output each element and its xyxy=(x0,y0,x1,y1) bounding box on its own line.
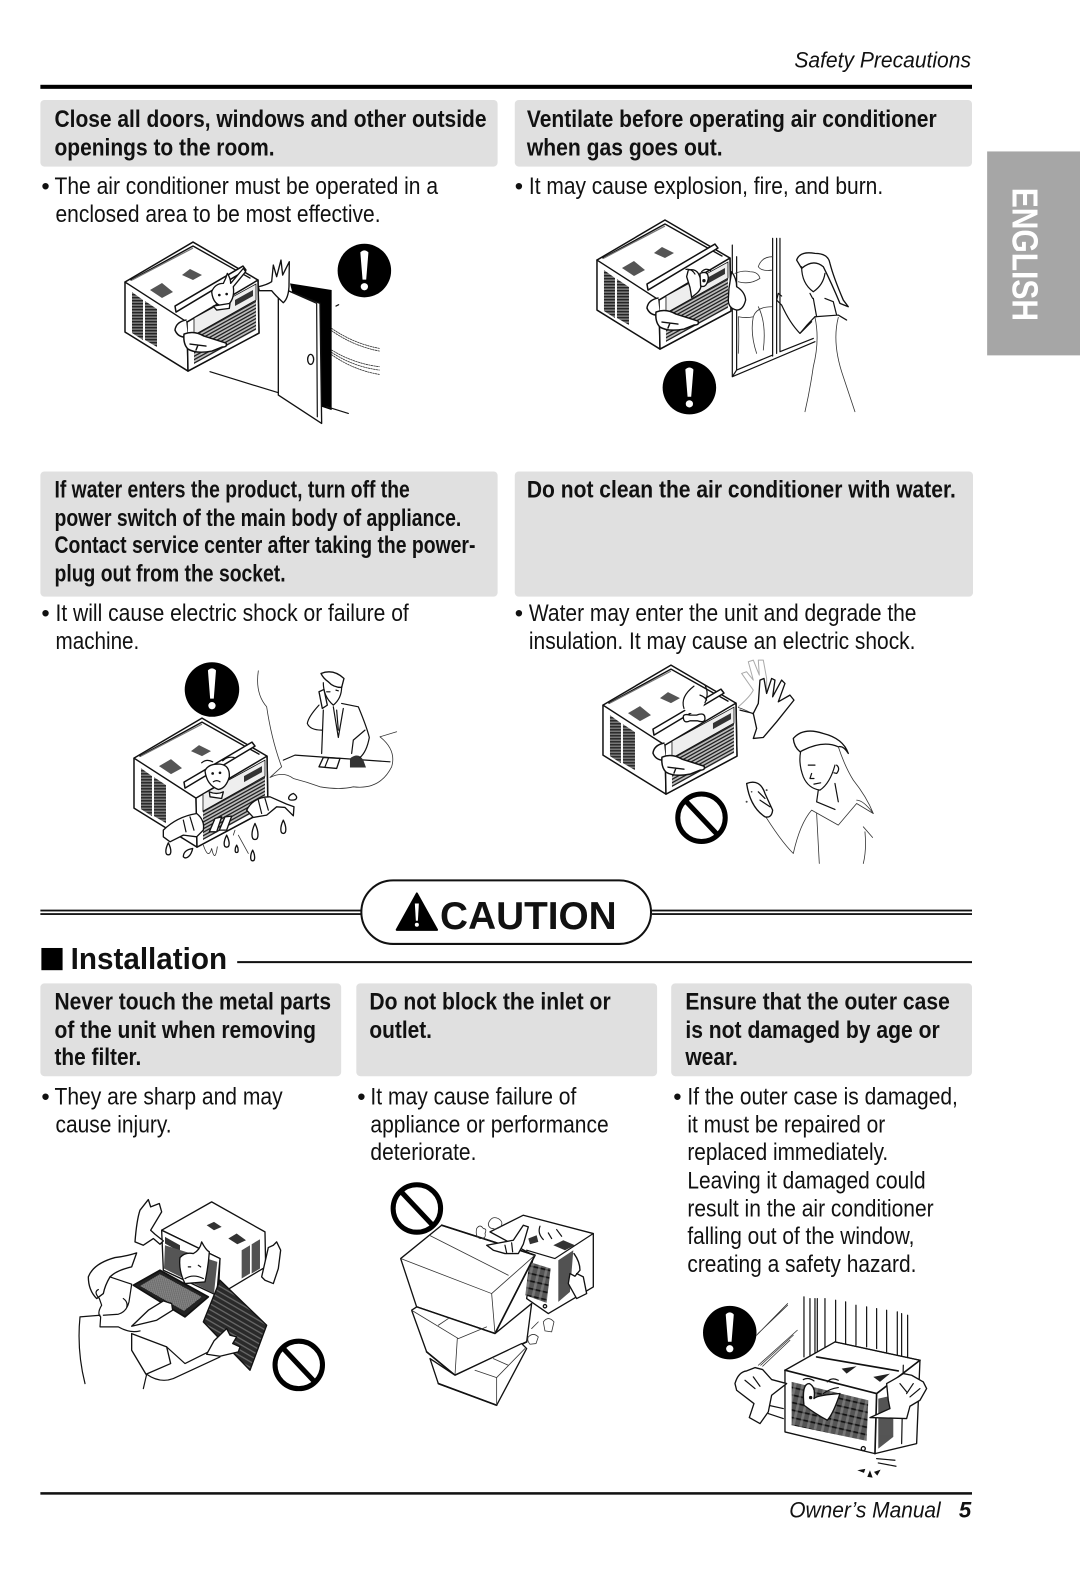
heading: ventilate: when gas goes out. xyxy=(526,135,723,161)
section heading: Installation: Installation xyxy=(71,943,227,976)
icon: prohibition sign xyxy=(393,1185,441,1232)
heading: do not clean: Do not clean the air conditioner with water. xyxy=(527,478,956,504)
text: inlet explanation: • xyxy=(357,1084,366,1110)
illustration: damaged unit falling from window xyxy=(735,1297,927,1478)
text: ventilate explanation: • xyxy=(515,174,523,200)
text: outer case explanation: falling out of the window, xyxy=(687,1224,914,1250)
illustration: air conditioner and woman with wet remote xyxy=(603,660,873,863)
header: Safety Precautions: Safety Precautions xyxy=(794,48,971,73)
panel: water enters the product xyxy=(40,471,498,861)
text: do not clean explanation: insulation. It may cause an electric shock. xyxy=(529,629,915,655)
heading: metal parts: the filter. xyxy=(55,1045,141,1071)
text: outer case explanation: replaced immediately. xyxy=(687,1140,888,1166)
heading: water enters xyxy=(40,471,498,597)
text: inlet explanation: deteriorate. xyxy=(370,1140,476,1166)
illustration: air conditioner by open door xyxy=(125,242,379,423)
panel: close doors and windows xyxy=(40,100,498,423)
text: water enters explanation xyxy=(41,601,409,655)
text: do not clean explanation: • xyxy=(515,601,523,627)
text: outer case explanation: creating a safety hazard. xyxy=(687,1252,916,1278)
text: inlet explanation: It may cause failure of xyxy=(370,1084,577,1110)
text: water enters explanation: It will cause electric shock or failure of xyxy=(56,601,409,627)
heading: outer case xyxy=(671,983,972,1076)
text: outer case explanation: it must be repaired or xyxy=(687,1113,885,1139)
illustration: air conditioner and woman at window xyxy=(597,220,855,412)
text: water enters explanation: machine. xyxy=(56,629,139,655)
illustration: boxes blocking the unit xyxy=(401,1215,593,1405)
heading: outer case: is not damaged by age or xyxy=(685,1018,940,1044)
text: metal parts explanation xyxy=(41,1084,283,1139)
heading: ventilate xyxy=(515,100,972,167)
heading: ventilate: Ventilate before operating air conditioner xyxy=(527,107,937,133)
section heading: Installation xyxy=(41,943,972,976)
text: inlet explanation xyxy=(357,1084,609,1166)
heading: outer case: wear. xyxy=(684,1045,738,1071)
text: close doors explanation: enclosed area to be most effective. xyxy=(56,202,381,228)
caution banner: CAUTION xyxy=(440,894,617,938)
icon: prohibition sign xyxy=(678,794,725,841)
icon: mandatory exclamation xyxy=(185,662,239,717)
heading: water enters: Contact service center after taking the power- xyxy=(55,533,475,559)
heading: inlet: Do not block the inlet or xyxy=(369,990,611,1016)
side tab: English: ENGLISH xyxy=(1004,188,1045,321)
text: outer case explanation: • xyxy=(673,1084,682,1110)
icon: mandatory exclamation xyxy=(663,361,716,414)
text: do not clean explanation: Water may enter the unit and degrade the xyxy=(529,601,916,627)
heading: metal parts: of the unit when removing xyxy=(55,1018,316,1044)
footer: Owner's Manual page 5: Owner’s Manual xyxy=(789,1497,942,1522)
side tab: English xyxy=(987,151,1080,355)
heading: metal parts xyxy=(40,983,341,1076)
heading: close doors xyxy=(40,100,498,167)
panel: ensure outer case is not damaged xyxy=(671,983,972,1478)
heading: inlet xyxy=(356,983,657,1076)
text: metal parts explanation: • xyxy=(41,1084,50,1110)
icon: warning triangle xyxy=(397,893,437,930)
heading: water enters: plug out from the socket. xyxy=(55,562,286,588)
panel: never touch metal parts xyxy=(40,983,341,1389)
text: do not clean explanation xyxy=(515,601,916,655)
footer: Owner's Manual page 5 xyxy=(40,1492,972,1522)
heading: do not clean xyxy=(515,471,973,597)
illustration: wet air conditioner and man on phone xyxy=(134,671,397,861)
text: outer case explanation: result in the air conditioner xyxy=(687,1197,934,1223)
icon: mandatory exclamation xyxy=(703,1306,757,1359)
text: close doors explanation: The air conditioner must be operated in a xyxy=(55,174,439,200)
heading: close doors: Close all doors, windows and other outside xyxy=(55,107,487,133)
text: ventilate explanation: It may cause explosion, fire, and burn. xyxy=(529,174,883,200)
footer: Owner's Manual page 5: 5 xyxy=(959,1497,972,1522)
heading: inlet: outlet. xyxy=(369,1018,432,1044)
text: close doors explanation xyxy=(41,174,439,228)
text: outer case explanation: If the outer case is damaged, xyxy=(687,1084,958,1110)
icon: mandatory exclamation xyxy=(338,244,391,297)
heading: close doors: openings to the room. xyxy=(55,135,275,161)
heading: water enters: If water enters the product, turn off the xyxy=(55,478,410,504)
text: metal parts explanation: They are sharp and may xyxy=(55,1084,283,1110)
text: outer case explanation xyxy=(673,1084,958,1278)
caution banner xyxy=(40,880,972,944)
text: inlet explanation: appliance or performance xyxy=(370,1113,609,1139)
heading: water enters: power switch of the main body of appliance. xyxy=(55,506,461,532)
text: water enters explanation: • xyxy=(41,601,50,627)
text: outer case explanation: Leaving it damaged could xyxy=(687,1168,926,1194)
text: metal parts explanation: cause injury. xyxy=(56,1113,172,1139)
icon: prohibition sign xyxy=(275,1341,322,1389)
text: close doors explanation: • xyxy=(41,174,50,200)
illustration: man removing filter from unit xyxy=(79,1200,281,1389)
panel: do not clean with water xyxy=(515,471,973,863)
heading: metal parts: Never touch the metal parts xyxy=(55,990,331,1016)
panel: do not block inlet or outlet xyxy=(356,983,657,1405)
heading: outer case: Ensure that the outer case xyxy=(685,990,950,1016)
panel: ventilate when gas goes out xyxy=(515,100,972,414)
